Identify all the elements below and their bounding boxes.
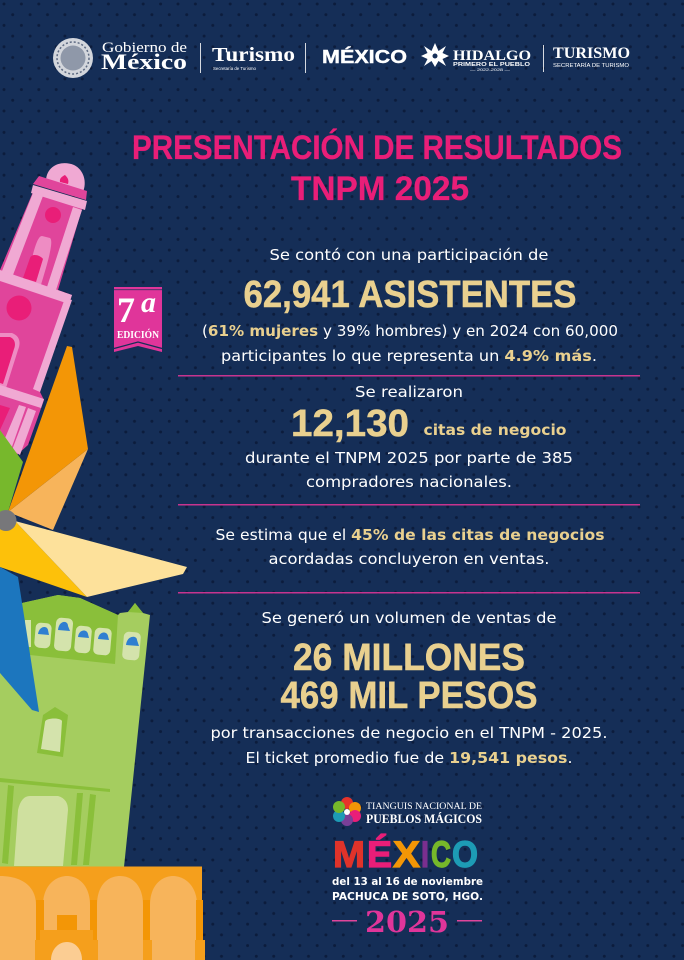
illustration: pink tower [0, 163, 87, 470]
text block: participation: (61% mujeres y 39% hombres) y en 2024 con 60,000 [202, 322, 618, 340]
logo: Hidalgo: PRIMERO EL PUEBLO [453, 62, 530, 68]
text block: business appointments [245, 383, 573, 491]
title: TNPM 2025 [291, 170, 469, 208]
text block: business appointments: 12,130 [291, 403, 409, 445]
event year: 2025 [365, 905, 449, 939]
logo: México: MÉXICO [322, 46, 407, 67]
logo: Hidalgo: — 2022-2028 — [470, 68, 511, 72]
logo: México multicolor: M [333, 833, 365, 875]
divider [178, 592, 640, 594]
text block: participation [202, 246, 618, 365]
logo: Turismo Hidalgo [553, 45, 630, 69]
logo: México multicolor: I [421, 833, 429, 875]
logo: Gobierno de México: México [101, 49, 187, 74]
text block: business appointments: Se realizaron [355, 383, 463, 401]
logo: Turismo Hidalgo: SECRETARÍA DE TURISMO [553, 62, 630, 69]
text block: participation: Se contó con una participación de [270, 246, 548, 264]
illustration: green building [0, 595, 150, 867]
illustration: pinwheel [0, 346, 187, 712]
logo: Turismo Hidalgo: TURISMO [553, 45, 630, 62]
logo: Turismo Secretaría de Turismo: Turismo [212, 44, 295, 66]
badge: 7a edición [114, 286, 162, 352]
event dates and place: PACHUCA DE SOTO, HGO. [332, 891, 483, 903]
text block: sales volume: Se generó un volumen de ventas de [262, 609, 556, 627]
logo: México multicolor [333, 833, 478, 875]
text block: sales volume: por transacciones de negocio en el TNPM - 2025. [210, 724, 608, 742]
logo: Turismo Secretaría de Turismo: Secretaría de Turismo [213, 66, 256, 71]
event dates and place: del 13 al 16 de noviembre [332, 876, 483, 888]
logo: Tianguis Nacional de Pueblos Mágicos: PUEBLOS MÁGICOS [366, 811, 482, 826]
illustration: orange arcade [0, 866, 205, 960]
logo: Tianguis Nacional de Pueblos Mágicos: TIANGUIS NACIONAL DE [366, 802, 482, 812]
logo: Gobierno de México [53, 38, 187, 78]
text block: sales volume [210, 609, 608, 767]
divider [178, 504, 640, 506]
logo: México multicolor: C [431, 833, 451, 875]
logo: México multicolor: É [367, 833, 392, 875]
text block: participation: participantes lo que representa un 4.9% más . [221, 347, 597, 365]
title: PRESENTACIÓN DE RESULTADOS [132, 129, 622, 167]
logo: Tianguis Nacional de Pueblos Mágicos [333, 797, 482, 826]
logo: México multicolor: O [452, 833, 478, 875]
text block: sales volume: 26 MILLONES [293, 637, 525, 679]
text block: estimated sales [216, 526, 605, 568]
divider [178, 375, 640, 376]
text block: business appointments: citas de negocio [424, 421, 566, 439]
logo: México multicolor: X [393, 833, 420, 875]
text block: estimated sales: acordadas concluyeron en ventas. [268, 550, 550, 568]
text block: sales volume: 469 MIL PESOS [280, 675, 538, 717]
header logo strip [53, 38, 630, 78]
badge: 7a edición: 7 [117, 290, 135, 330]
logo: Gobierno de México: Gobierno de [102, 40, 187, 56]
title [132, 129, 622, 208]
text block: estimated sales: Se estima que el 45% de las citas de negocios [216, 526, 605, 544]
logo: Hidalgo: HIDALGO [453, 48, 531, 64]
badge: 7a edición: a [141, 286, 156, 319]
badge: 7a edición: EDICIÓN [117, 329, 159, 341]
text block: business appointments: durante el TNPM 2025 por parte de 385 [245, 449, 573, 467]
logo: Hidalgo [421, 43, 531, 72]
text block: sales volume: El ticket promedio fue de 19,541 pesos . [246, 749, 573, 767]
event dates and place [332, 876, 483, 903]
text block: business appointments: compradores nacionales. [306, 473, 512, 491]
text block: participation: 62,941 ASISTENTES [244, 274, 576, 316]
